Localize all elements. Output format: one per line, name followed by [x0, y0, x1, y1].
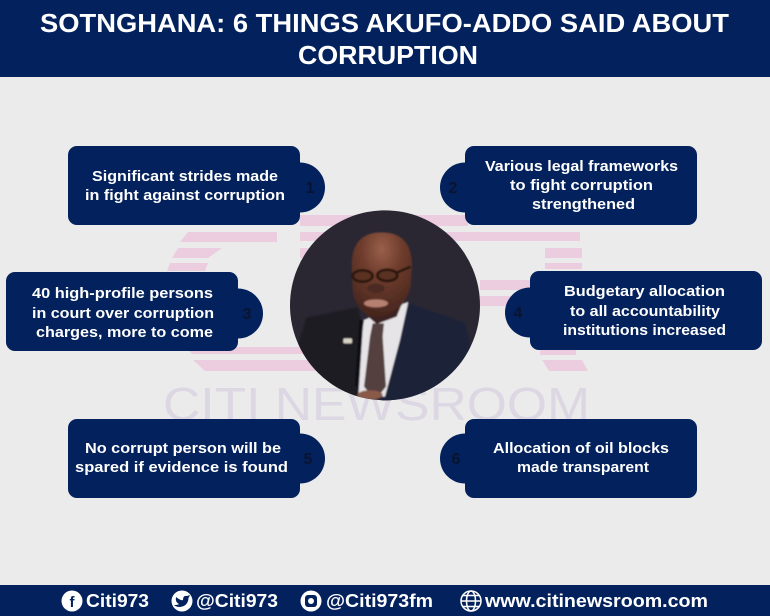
portrait: Akufo-Addo in circular photo: [290, 210, 480, 400]
shirt: [358, 302, 408, 397]
lapel pin: [343, 338, 352, 343]
panel: point 3: [6, 272, 263, 351]
twitter handle: [172, 590, 278, 612]
glasses: [353, 267, 411, 282]
hands: [357, 390, 383, 400]
panel: point 6: 6: [452, 451, 461, 468]
watermark: Citi Newsroom logo: CITI NEWSROOM: [163, 378, 590, 430]
website: www.citinewsroom.com: [484, 591, 708, 611]
microphone: [355, 320, 364, 387]
panel: point 2: [440, 146, 697, 225]
panel: point 2: to fight corruption: [510, 178, 653, 194]
panel: point 2: strengthened: [532, 197, 635, 213]
panel: point 4: 4: [514, 305, 523, 322]
panel: point 1: Significant strides made: [92, 169, 278, 185]
panel: point 3: 40 high-profile persons: [32, 286, 213, 302]
suit right side: [380, 303, 471, 407]
lips: [364, 299, 388, 307]
panel: point 6: [440, 419, 697, 498]
panel: point 4: institutions increased: [563, 323, 726, 339]
header banner: [0, 0, 770, 77]
panel: point 4: [505, 271, 762, 350]
panel: point 6: made transparent: [517, 460, 649, 476]
footer bar: [0, 585, 770, 616]
watermark: Citi Newsroom logo: [163, 215, 590, 430]
panel: point 6: Allocation of oil blocks: [493, 441, 669, 457]
twitter handle: @Citi973: [196, 591, 278, 611]
panel: point 4: to all accountability: [570, 304, 720, 320]
instagram handle: @Citi973fm: [326, 591, 433, 611]
facebook handle: [62, 590, 149, 612]
panel: point 1: in fight against corruption: [85, 188, 285, 204]
panel: point 5: 5: [304, 451, 313, 468]
panel: point 1: 1: [306, 180, 315, 197]
nose: [367, 284, 385, 293]
suit left side: [297, 307, 377, 407]
head: [352, 232, 412, 317]
panel: point 2: 2: [449, 180, 458, 197]
facebook handle: Citi973: [86, 591, 149, 611]
title: SOTNGHANA: 6 THINGS AKUFO-ADDO SAID ABOUT: [40, 8, 729, 38]
facebook handle: f: [70, 594, 76, 611]
panel: point 5: spared if evidence is found: [75, 460, 288, 476]
panel: point 5: No corrupt person will be: [85, 441, 281, 457]
title: CORRUPTION: [298, 40, 478, 70]
panel: point 3: in court over corruption: [32, 306, 214, 322]
panel: point 3: charges, more to come: [36, 325, 213, 341]
title: [40, 8, 729, 70]
panel: point 5: [68, 419, 325, 498]
panel: point 1: [68, 146, 325, 225]
neck: [366, 305, 402, 325]
panel: point 2: Various legal frameworks: [485, 159, 678, 175]
panel: point 3: 3: [243, 306, 252, 323]
panel: point 4: Budgetary allocation: [564, 284, 725, 300]
tie: [364, 323, 386, 400]
